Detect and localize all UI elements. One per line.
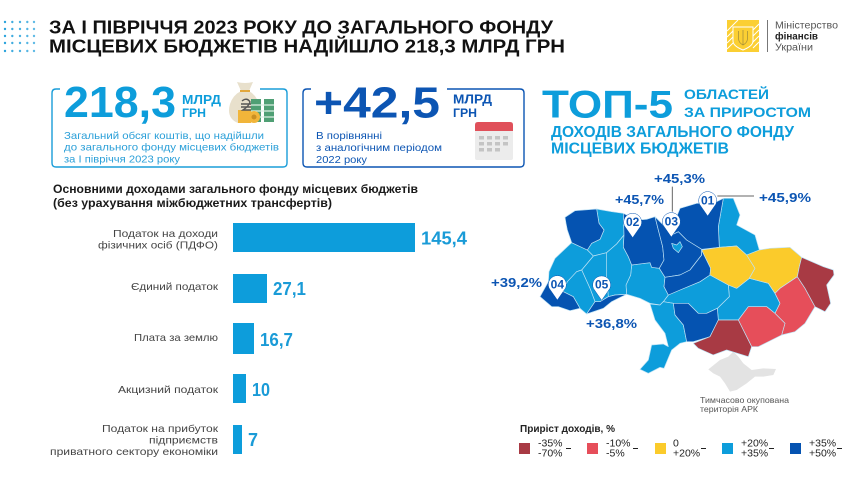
dark red regions bbox=[693, 257, 834, 357]
heading: top-5 regions: МІСЦЕВИХ БЮДЖЕТІВ bbox=[551, 140, 729, 158]
legend: -10% bbox=[606, 438, 631, 450]
bar chart heading: Основними доходами загального фонду місцевих бюджетів bbox=[53, 184, 418, 196]
pin 03: 03 bbox=[665, 214, 678, 228]
title bbox=[49, 16, 565, 56]
bar chart heading: (без урахування міжбюджетних трансфертів) bbox=[53, 198, 332, 210]
decorative dot grid icon bbox=[4, 21, 35, 52]
bar chart: Податок на прибуток bbox=[102, 423, 218, 435]
bar chart: фізичних осіб (ПДФО) bbox=[98, 240, 218, 252]
panel: increase vs 2022: +42,5 bbox=[314, 78, 440, 128]
bar chart: Плата за землю bbox=[134, 332, 218, 344]
note: occupied Crimea bbox=[700, 395, 789, 414]
legend: -35% bbox=[538, 438, 563, 450]
legend: +35% bbox=[809, 438, 836, 450]
legend: 0 bbox=[673, 438, 679, 450]
yellow regions bbox=[702, 246, 802, 293]
logo: Ministry of Finance of Ukraine: України bbox=[775, 42, 813, 54]
bar chart: 145,4 bbox=[421, 228, 467, 248]
pin 02 bbox=[624, 213, 642, 238]
bar chart: Акцизний податок bbox=[118, 384, 218, 396]
map percentage labels bbox=[491, 171, 812, 331]
heading: top-5 regions bbox=[542, 84, 811, 158]
panel: total revenue: ГРН bbox=[182, 106, 206, 120]
panel: total revenue: до загального фонду місцевих бюджетів bbox=[64, 142, 279, 154]
leader lines bbox=[672, 187, 754, 212]
panel: increase vs 2022: ГРН bbox=[453, 106, 477, 120]
map of Ukraine bbox=[540, 187, 834, 392]
map percentage labels: +39,2% bbox=[491, 275, 543, 290]
legend bbox=[519, 424, 842, 460]
panel: increase vs 2022: 2022 року bbox=[316, 154, 368, 166]
bar chart: приватного сектору економіки bbox=[50, 446, 218, 458]
bar chart: підприємств bbox=[149, 434, 218, 446]
light blue regions bbox=[548, 198, 780, 373]
map percentage labels: +36,8% bbox=[586, 316, 638, 331]
heading: top-5 regions: ДОХОДІВ ЗАГАЛЬНОГО ФОНДУ bbox=[551, 124, 795, 141]
logo: Ministry of Finance of Ukraine bbox=[727, 20, 838, 54]
map percentage labels: +45,3% bbox=[654, 171, 706, 186]
icon: money bag bbox=[229, 82, 274, 123]
legend: Приріст доходів, % bbox=[520, 424, 615, 435]
bar chart: Податок на доходи bbox=[113, 228, 218, 240]
panel: total revenue: Загальний обсяг коштів, що надійшли bbox=[64, 130, 264, 142]
bar chart: Єдиний податок bbox=[131, 281, 218, 293]
pin 05: 05 bbox=[595, 278, 609, 292]
legend: -70% bbox=[538, 448, 563, 460]
bar chart: 27,1 bbox=[273, 279, 306, 299]
pin 03 bbox=[662, 213, 680, 237]
heading: top-5 regions: ЗА ПРИРОСТОМ bbox=[684, 104, 811, 120]
logo: Ministry of Finance of Ukraine: фінансів bbox=[775, 30, 818, 42]
panel: increase vs 2022: В порівнянні bbox=[316, 130, 382, 142]
bar chart: 7 bbox=[248, 430, 258, 450]
bar chart: 16,7 bbox=[260, 330, 293, 350]
pin 02: 02 bbox=[626, 215, 640, 229]
legend: +20% bbox=[673, 448, 700, 460]
heading: top-5 regions: ОБЛАСТЕЙ bbox=[684, 85, 769, 102]
pin 01 bbox=[699, 192, 717, 216]
title: ЗА І ПІВРІЧЧЯ 2023 РОКУ ДО ЗАГАЛЬНОГО ФОНДУ bbox=[49, 16, 554, 38]
panel: total revenue: за І півріччя 2023 року bbox=[64, 154, 181, 166]
note: occupied Crimea: Тимчасово окупована bbox=[700, 395, 789, 405]
bar chart bbox=[50, 223, 467, 458]
title: МІСЦЕВИХ БЮДЖЕТІВ НАДІЙШЛО 218,3 МЛРД ГРН bbox=[49, 36, 565, 56]
legend: +20% bbox=[741, 438, 768, 450]
panel: total revenue: МЛРД bbox=[182, 92, 222, 107]
icon: calendar bbox=[475, 122, 513, 160]
bar chart: 10 bbox=[252, 380, 270, 400]
pin 04: 04 bbox=[551, 277, 564, 291]
red regions bbox=[738, 277, 815, 347]
note: occupied Crimea: територія АРК bbox=[700, 404, 758, 414]
legend: -5% bbox=[606, 448, 625, 460]
panel: increase vs 2022: МЛРД bbox=[453, 92, 493, 106]
pin 01: 01 bbox=[701, 193, 715, 207]
panel: increase vs 2022: з аналогічним періодом bbox=[316, 142, 442, 154]
dark blue regions bbox=[540, 198, 723, 342]
logo: Ministry of Finance of Ukraine: Міністерство bbox=[775, 20, 838, 32]
region: Crimea (occupied) bbox=[708, 352, 776, 392]
map percentage labels: +45,7% bbox=[615, 192, 664, 207]
panel: total revenue: 218,3 bbox=[64, 78, 176, 127]
legend: +35% bbox=[741, 448, 768, 460]
legend: +50% bbox=[809, 448, 836, 460]
pin 04 bbox=[548, 276, 566, 300]
panel: total revenue bbox=[52, 78, 287, 167]
heading: top-5 regions: ТОП-5 bbox=[542, 84, 673, 126]
panel: increase vs 2022 bbox=[303, 78, 524, 167]
bar chart heading bbox=[53, 184, 418, 210]
map percentage labels: +45,9% bbox=[759, 190, 812, 205]
region: Kyiv city bbox=[672, 242, 682, 253]
pin 05 bbox=[593, 276, 611, 300]
